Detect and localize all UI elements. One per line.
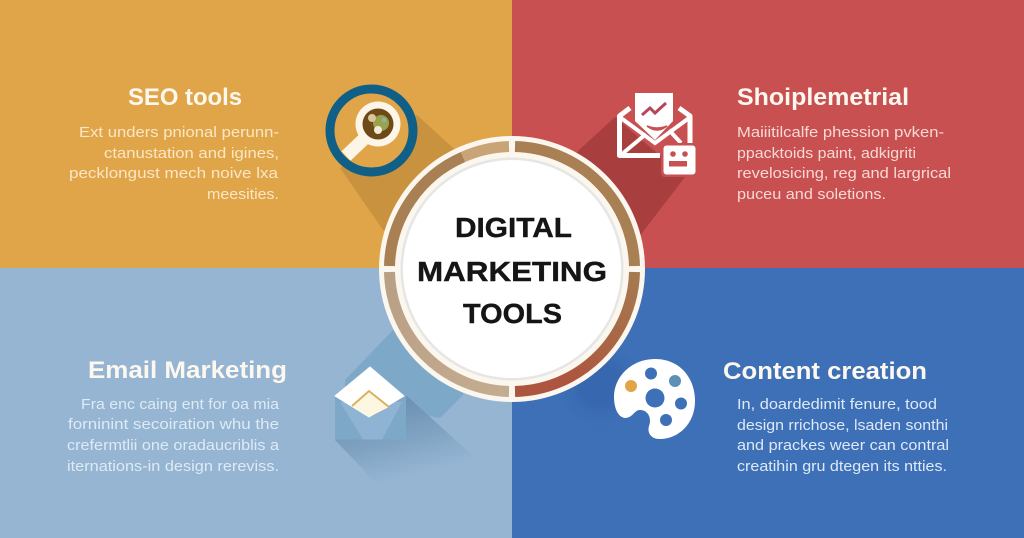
panel: Email Marketing [0, 268, 512, 538]
icon: open envelope [335, 367, 406, 440]
ring segment: top right [515, 146, 634, 266]
panel: Content creation [512, 268, 1024, 538]
icon shadow: email top [345, 330, 470, 418]
ring segment: top left [390, 146, 509, 266]
body text: Content creation: design rrichose, lsaden sonthi [737, 417, 948, 434]
body text: SEO tools: ctanustation and igines, [104, 145, 279, 162]
icon: magnifying glass [330, 89, 413, 172]
body text: Content creation: creatihin gru dtegen its ntties. [737, 458, 947, 475]
panel: Shopify metrics [512, 0, 1024, 268]
body text: Shoiplemetrial: puceu and soletions. [737, 186, 886, 203]
title: Digital Marketing Tools: MARKETING [417, 256, 607, 287]
icon shadow: SEO [340, 115, 460, 230]
heading: Email Marketing: Email Marketing [88, 357, 287, 384]
body text: Shoiplemetrial: ppacktoids paint, adkigriti [737, 145, 916, 162]
body text: Shoiplemetrial: revelosicing, reg and largrical [737, 165, 951, 182]
body text: Email Marketing [67, 396, 280, 475]
panel: SEO tools [0, 0, 512, 268]
body text: Shoiplemetrial: Maiiitilcalfe phession pvken- [737, 124, 944, 141]
body text: Email Marketing: iternations-in design rereviss. [67, 458, 279, 475]
heading: SEO tools: SEO tools [128, 84, 242, 111]
icon shadow: email bottom [335, 396, 473, 487]
body text: Email Marketing: crefermtlii one oradaucriblis a [67, 437, 280, 454]
body text: Content creation: and prackes weer can contral [737, 437, 949, 454]
body text: SEO tools: pecklongust mech noive lxa [69, 165, 279, 182]
title: Digital Marketing Tools [417, 212, 607, 329]
icon shadow: mail [540, 117, 685, 268]
body text: SEO tools [69, 124, 279, 203]
body text: Email Marketing: forninint secoiration whu the [68, 416, 279, 433]
body text: Content creation: In, doardedimit fenure, tood [737, 396, 937, 413]
ring segment: bottom left [390, 272, 509, 392]
body text: Content creation [737, 396, 949, 475]
heading: Shoiplemetrial: Shoiplemetrial [737, 84, 909, 111]
ring segment: bottom right [515, 272, 634, 392]
icon: mail with chart [620, 93, 698, 177]
icon shadow: palette [548, 335, 652, 435]
icon: paint palette [614, 359, 695, 439]
body text: SEO tools: meesities. [207, 186, 279, 203]
body text: Email Marketing: Fra enc caing ent for oa mia [81, 396, 280, 413]
center circle [379, 136, 645, 402]
body text: Shoiplemetrial [737, 124, 951, 203]
heading: Content creation: Content creation [723, 358, 927, 385]
title: Digital Marketing Tools: DIGITAL [455, 212, 572, 243]
body text: SEO tools: Ext unders pnional perunn- [79, 124, 279, 141]
title: Digital Marketing Tools: TOOLS [463, 298, 562, 329]
